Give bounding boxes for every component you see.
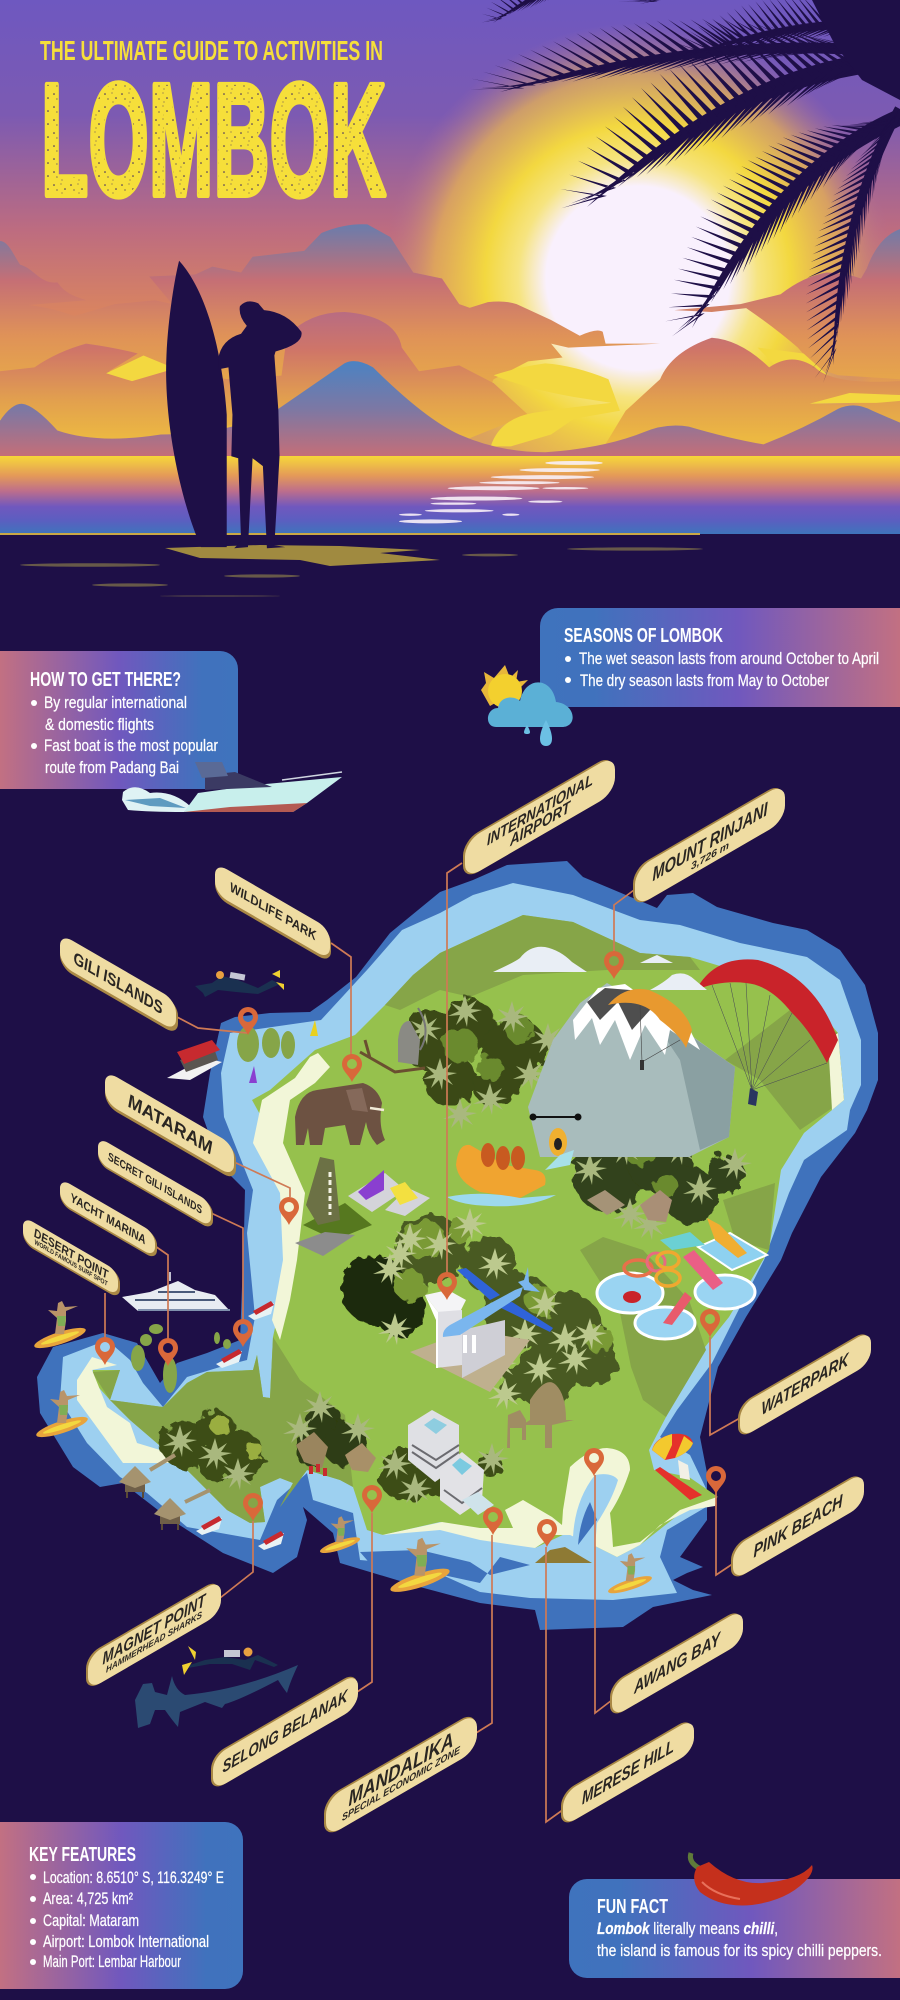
- sun reflection: [399, 461, 603, 523]
- hook bay: [573, 1474, 618, 1547]
- label: merese hill: MERESE HILL: [582, 1736, 674, 1809]
- land: [92, 915, 844, 1557]
- small boats: [196, 1301, 284, 1550]
- icon: chilli pepper: [690, 1853, 813, 1905]
- label: magnet point: MAGNET POINT: [102, 1589, 207, 1669]
- panel: key features: Main Port: Lembar Harbour: [43, 1952, 181, 1971]
- panel: key features: KEY FEATURES: [29, 1844, 136, 1866]
- icon: hotel towers: [408, 1410, 494, 1515]
- label: secret gili islands: SECRET GILI ISLANDS: [108, 1149, 202, 1217]
- panel: fun fact: [569, 1879, 900, 1978]
- forest: hotel gardens: [378, 1438, 509, 1505]
- infographic canvas: LOMBOK: [41, 50, 386, 229]
- icon: passenger boat: [167, 1040, 222, 1080]
- label: mandalika: SPECIAL ECONOMIC ZONE: [342, 1744, 461, 1824]
- surfer silhouette: [218, 301, 302, 548]
- icon: monkey: [360, 1008, 426, 1072]
- panel: fun fact: FUN FACT: [597, 1896, 668, 1918]
- title line: THE ULTIMATE GUIDE TO ACTIVITIES IN: [40, 35, 383, 66]
- connector lines: [105, 863, 740, 1822]
- label: gili islands: GILI ISLANDS: [74, 947, 163, 1019]
- label: selong belanak: SELONG BELANAK: [222, 1684, 349, 1777]
- label: wildlife park: WILDLIFE PARK: [230, 879, 317, 945]
- icon: city tower and shops: [295, 1157, 430, 1256]
- sand shoreline: [0, 533, 703, 597]
- label: desert point: [23, 1216, 120, 1299]
- label: mandalika: [324, 1710, 477, 1839]
- panel: fun fact: Lombok literally means chilli,: [597, 1919, 778, 1938]
- panel: how to get there: route from Padang Bai: [45, 758, 179, 777]
- icon: rafting boat: [447, 1143, 556, 1206]
- panel: how to get there: Fast boat is the most popular: [44, 736, 218, 755]
- label: gili islands: [60, 933, 178, 1036]
- forest: central north: [400, 995, 565, 1130]
- icon: yacht: [122, 1272, 230, 1311]
- label: awang bay: [610, 1607, 743, 1719]
- label: merese hill: [561, 1716, 694, 1828]
- label: yacht marina: YACHT MARINA: [71, 1189, 145, 1248]
- panel: seasons of Lombok: The dry season lasts from May to October: [580, 671, 829, 690]
- icon: airport terminal: [410, 1290, 530, 1392]
- icon: speedboat: [122, 762, 342, 812]
- gili islands: [237, 1026, 295, 1062]
- surfers: [32, 1301, 653, 1597]
- icon: hammerhead shark: [135, 1665, 298, 1728]
- label: mataram: [105, 1070, 236, 1181]
- shallow water: [60, 883, 861, 1600]
- forest: south west: [161, 1410, 264, 1490]
- panel: key features: Location: 8.6510° S, 116.3249° E: [43, 1868, 224, 1887]
- label: secret gili islands: [98, 1137, 213, 1231]
- label: pink beach: [731, 1470, 864, 1582]
- label: mandalika: MANDALIKA: [349, 1726, 453, 1811]
- label: mount rinjani: MOUNT RINJANI: [652, 797, 768, 886]
- secret gili islands: [131, 1324, 231, 1393]
- label: international airport: INTERNATIONAL: [487, 769, 593, 849]
- forest: central: [341, 1208, 618, 1410]
- icon: mountain islet: [535, 1547, 592, 1563]
- label: selong belanak: [211, 1671, 358, 1792]
- panel: how to get there: [0, 651, 238, 789]
- sea: [0, 456, 900, 534]
- label: international airport: [463, 752, 615, 881]
- deep water: [37, 861, 878, 1630]
- distant mountains: [0, 361, 900, 458]
- icon: orange paraglider: [608, 989, 692, 1070]
- forest: south middle: [283, 1391, 376, 1476]
- island map: [32, 861, 878, 1630]
- icon: beach umbrella and lounger: [652, 1434, 702, 1500]
- label: international airport: AIRPORT: [509, 796, 571, 851]
- sky: [0, 0, 900, 460]
- label: desert point: DESERT POINT: [34, 1225, 109, 1283]
- location pins: [95, 951, 726, 1547]
- label: mount rinjani: [633, 780, 785, 909]
- icon: wedding chair gazebo: [507, 1382, 574, 1448]
- hero sunset scene: [0, 0, 900, 597]
- label: desert point: WORLD FAMOUS SURF SPOT: [35, 1237, 108, 1289]
- palm fronds: [470, 0, 900, 383]
- label: waterpark: [738, 1328, 871, 1440]
- label: waterpark: WATERPARK: [762, 1348, 850, 1420]
- panel: how to get there: & domestic flights: [45, 715, 154, 734]
- sailboats: [249, 1020, 318, 1083]
- label: mataram: MATARAM: [128, 1088, 213, 1160]
- panel: seasons of Lombok: SEASONS OF LOMBOK: [564, 625, 723, 647]
- icon: clouds: [493, 947, 707, 990]
- label: wildlife park: [215, 862, 331, 964]
- icon: waterpark: [597, 1218, 767, 1339]
- panel: how to get there: HOW TO GET THERE?: [30, 669, 181, 691]
- upper hill shade: [385, 915, 700, 1010]
- panel: key features: Airport: Lombok International: [43, 1932, 209, 1951]
- forest: east: [572, 1098, 752, 1240]
- label: pink beach: PINK BEACH: [754, 1490, 843, 1562]
- icon: sun and rain cloud: [481, 665, 573, 746]
- label: magnet point: [86, 1577, 221, 1691]
- right shade: [580, 1237, 706, 1417]
- icon: bungalows and huts: [119, 1455, 210, 1530]
- panel: key features: Area: 4,725 km²: [43, 1889, 133, 1908]
- sun glow: [383, 23, 893, 533]
- panel: how to get there: By regular international: [44, 693, 187, 712]
- icon: elephant: [295, 1083, 385, 1145]
- label: magnet point: HAMMERHEAD SHARKS: [106, 1610, 202, 1676]
- icon: red paraglider: [696, 959, 838, 1106]
- beaches: [77, 1033, 844, 1557]
- label: yacht marina: [60, 1178, 157, 1260]
- icon: diver north: [195, 970, 284, 997]
- label: mount rinjani: 3,726 m: [691, 839, 729, 873]
- icon: kayak: [530, 1114, 582, 1170]
- icon: plane: [443, 1267, 553, 1337]
- panel: seasons of Lombok: [540, 608, 900, 707]
- icon: diver south: [182, 1646, 278, 1675]
- lower left shade: [110, 1337, 353, 1523]
- icon: mount rinjani: [528, 983, 735, 1157]
- sunset clouds: [0, 224, 900, 458]
- panel: key features: Capital: Mataram: [43, 1911, 139, 1930]
- surfboard silhouette: [166, 261, 227, 547]
- label: awang bay: AWANG BAY: [633, 1627, 721, 1699]
- panel: key features: [0, 1822, 243, 1989]
